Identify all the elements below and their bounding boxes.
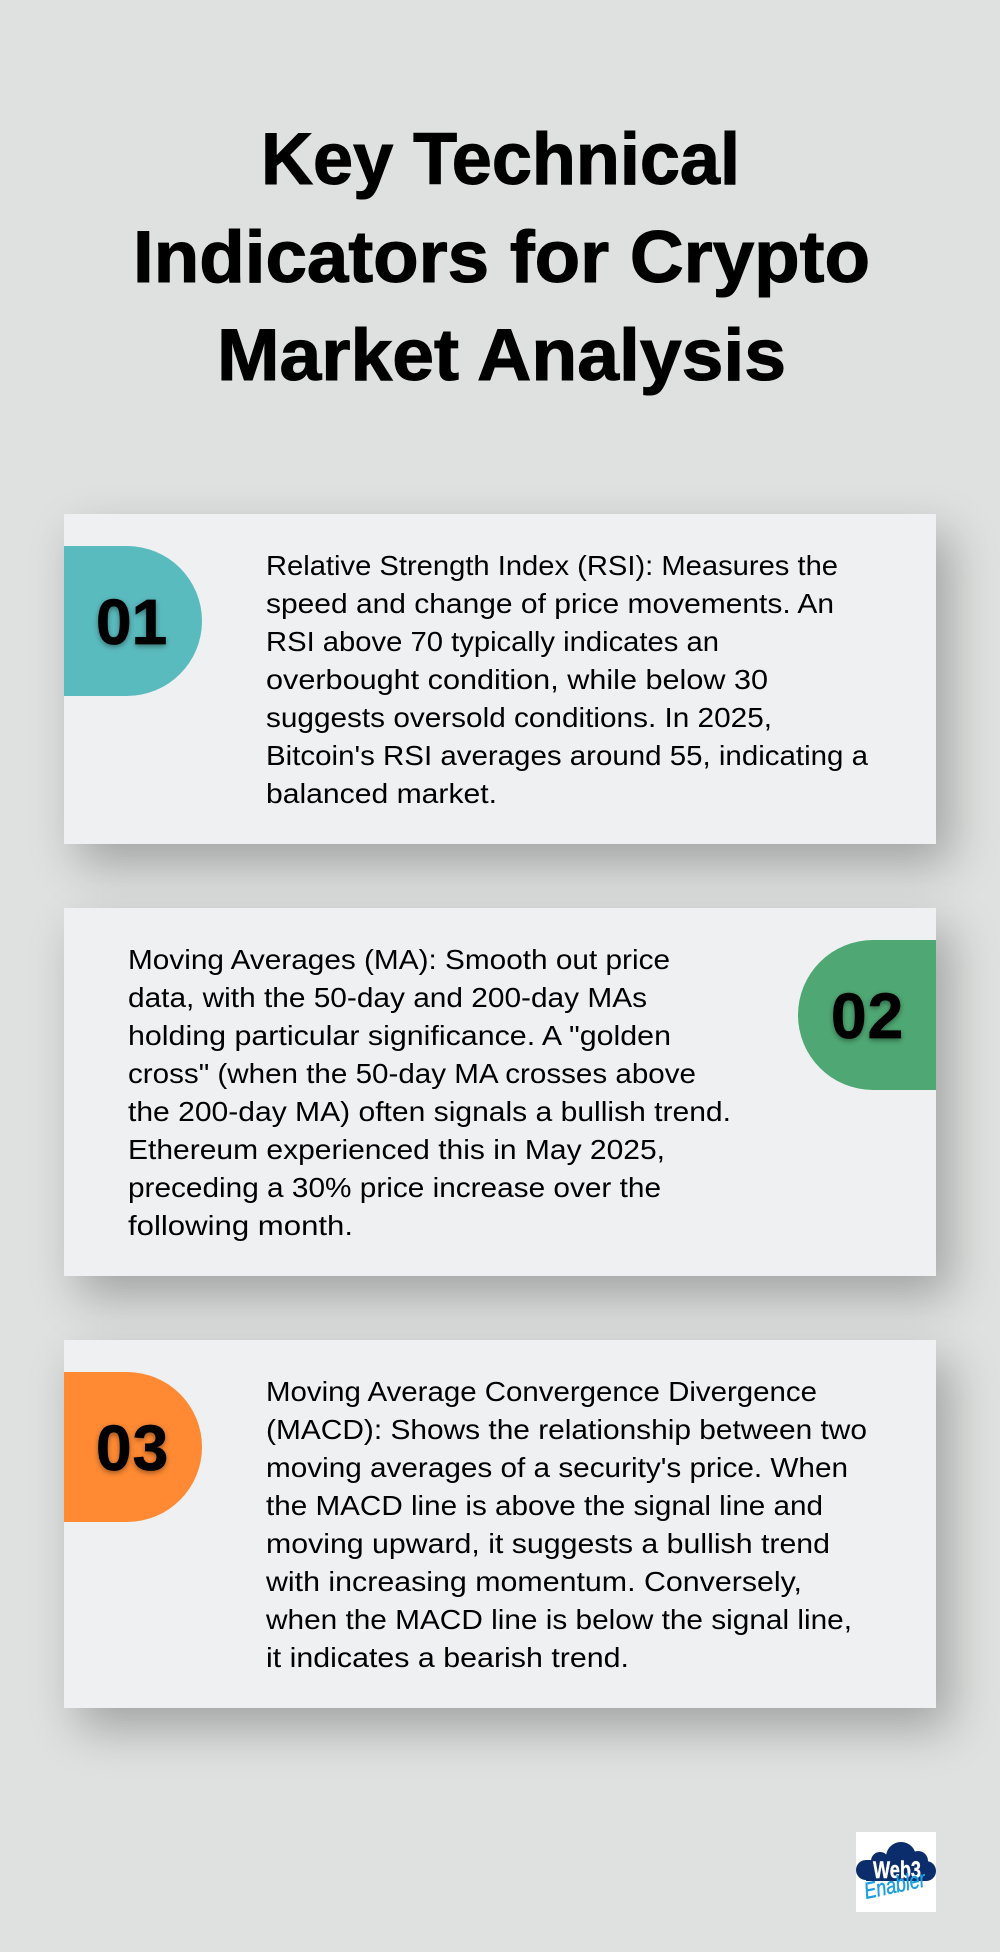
- text block: MA description: the 200-day MA) often signals a bullish trend.: [128, 1096, 731, 1127]
- title: Indicators for Crypto: [133, 217, 870, 298]
- badge: 01: [64, 546, 202, 696]
- text block: MACD description: with increasing momentum. Conversely,: [265, 1566, 802, 1597]
- text block: MACD description: (MACD): Shows the relationship between two: [266, 1414, 867, 1445]
- badge: 03: [64, 1372, 202, 1522]
- text block: MACD description: Moving Average Convergence Divergence: [266, 1376, 817, 1407]
- text block: RSI description: overbought condition, while below 30: [266, 664, 768, 695]
- text block: MACD description: moving upward, it suggests a bullish trend: [266, 1528, 830, 1559]
- panel: RSI: [64, 514, 936, 844]
- title: Market Analysis: [217, 315, 786, 396]
- text block: MACD description: moving averages of a security's price. When: [266, 1452, 848, 1483]
- title: Key Technical: [261, 119, 740, 200]
- text block: MACD description: it indicates a bearish trend.: [266, 1642, 629, 1673]
- icon: cloud: [856, 1842, 936, 1881]
- text block: MACD description: [265, 1376, 867, 1673]
- text block: RSI description: Relative Strength Index (RSI): Measures the: [266, 550, 838, 581]
- number 01: 01: [96, 586, 167, 658]
- text block: RSI description: suggests oversold conditions. In 2025,: [266, 702, 772, 733]
- text block: MA description: cross" (when the 50-day MA crosses above: [128, 1058, 696, 1089]
- text block: RSI description: speed and change of price movements. An: [266, 588, 834, 619]
- panel: MACD: [64, 1340, 936, 1708]
- text block: MA description: data, with the 50-day and 200-day MAs: [128, 982, 647, 1013]
- number 03: 03: [96, 1412, 169, 1484]
- text block: MA description: preceding a 30% price increase over the: [128, 1172, 661, 1203]
- badge: 02: [798, 940, 936, 1090]
- text block: MA description: Moving Averages (MA): Smooth out price: [128, 944, 670, 975]
- text block: MA description: holding particular significance. A "golden: [128, 1020, 671, 1051]
- text block: RSI description: [266, 550, 869, 809]
- text block: MA description: Ethereum experienced this in May 2025,: [128, 1134, 665, 1165]
- text block: MACD description: the MACD line is above the signal line and: [266, 1490, 823, 1521]
- text block: MA description: [128, 944, 731, 1241]
- text block: RSI description: balanced market.: [266, 778, 497, 809]
- text block: RSI description: RSI above 70 typically indicates an: [266, 626, 719, 657]
- number 02: 02: [831, 980, 904, 1052]
- title: [133, 119, 870, 396]
- icon: Web3 Enabler logo: [856, 1832, 936, 1912]
- text block: RSI description: Bitcoin's RSI averages around 55, indicating a: [266, 740, 869, 771]
- text block: MACD description: when the MACD line is below the signal line,: [265, 1604, 852, 1635]
- logo word: Web3: Web3: [873, 1857, 921, 1884]
- text block: MA description: following month.: [128, 1210, 353, 1241]
- panel: Moving Averages: [64, 908, 936, 1276]
